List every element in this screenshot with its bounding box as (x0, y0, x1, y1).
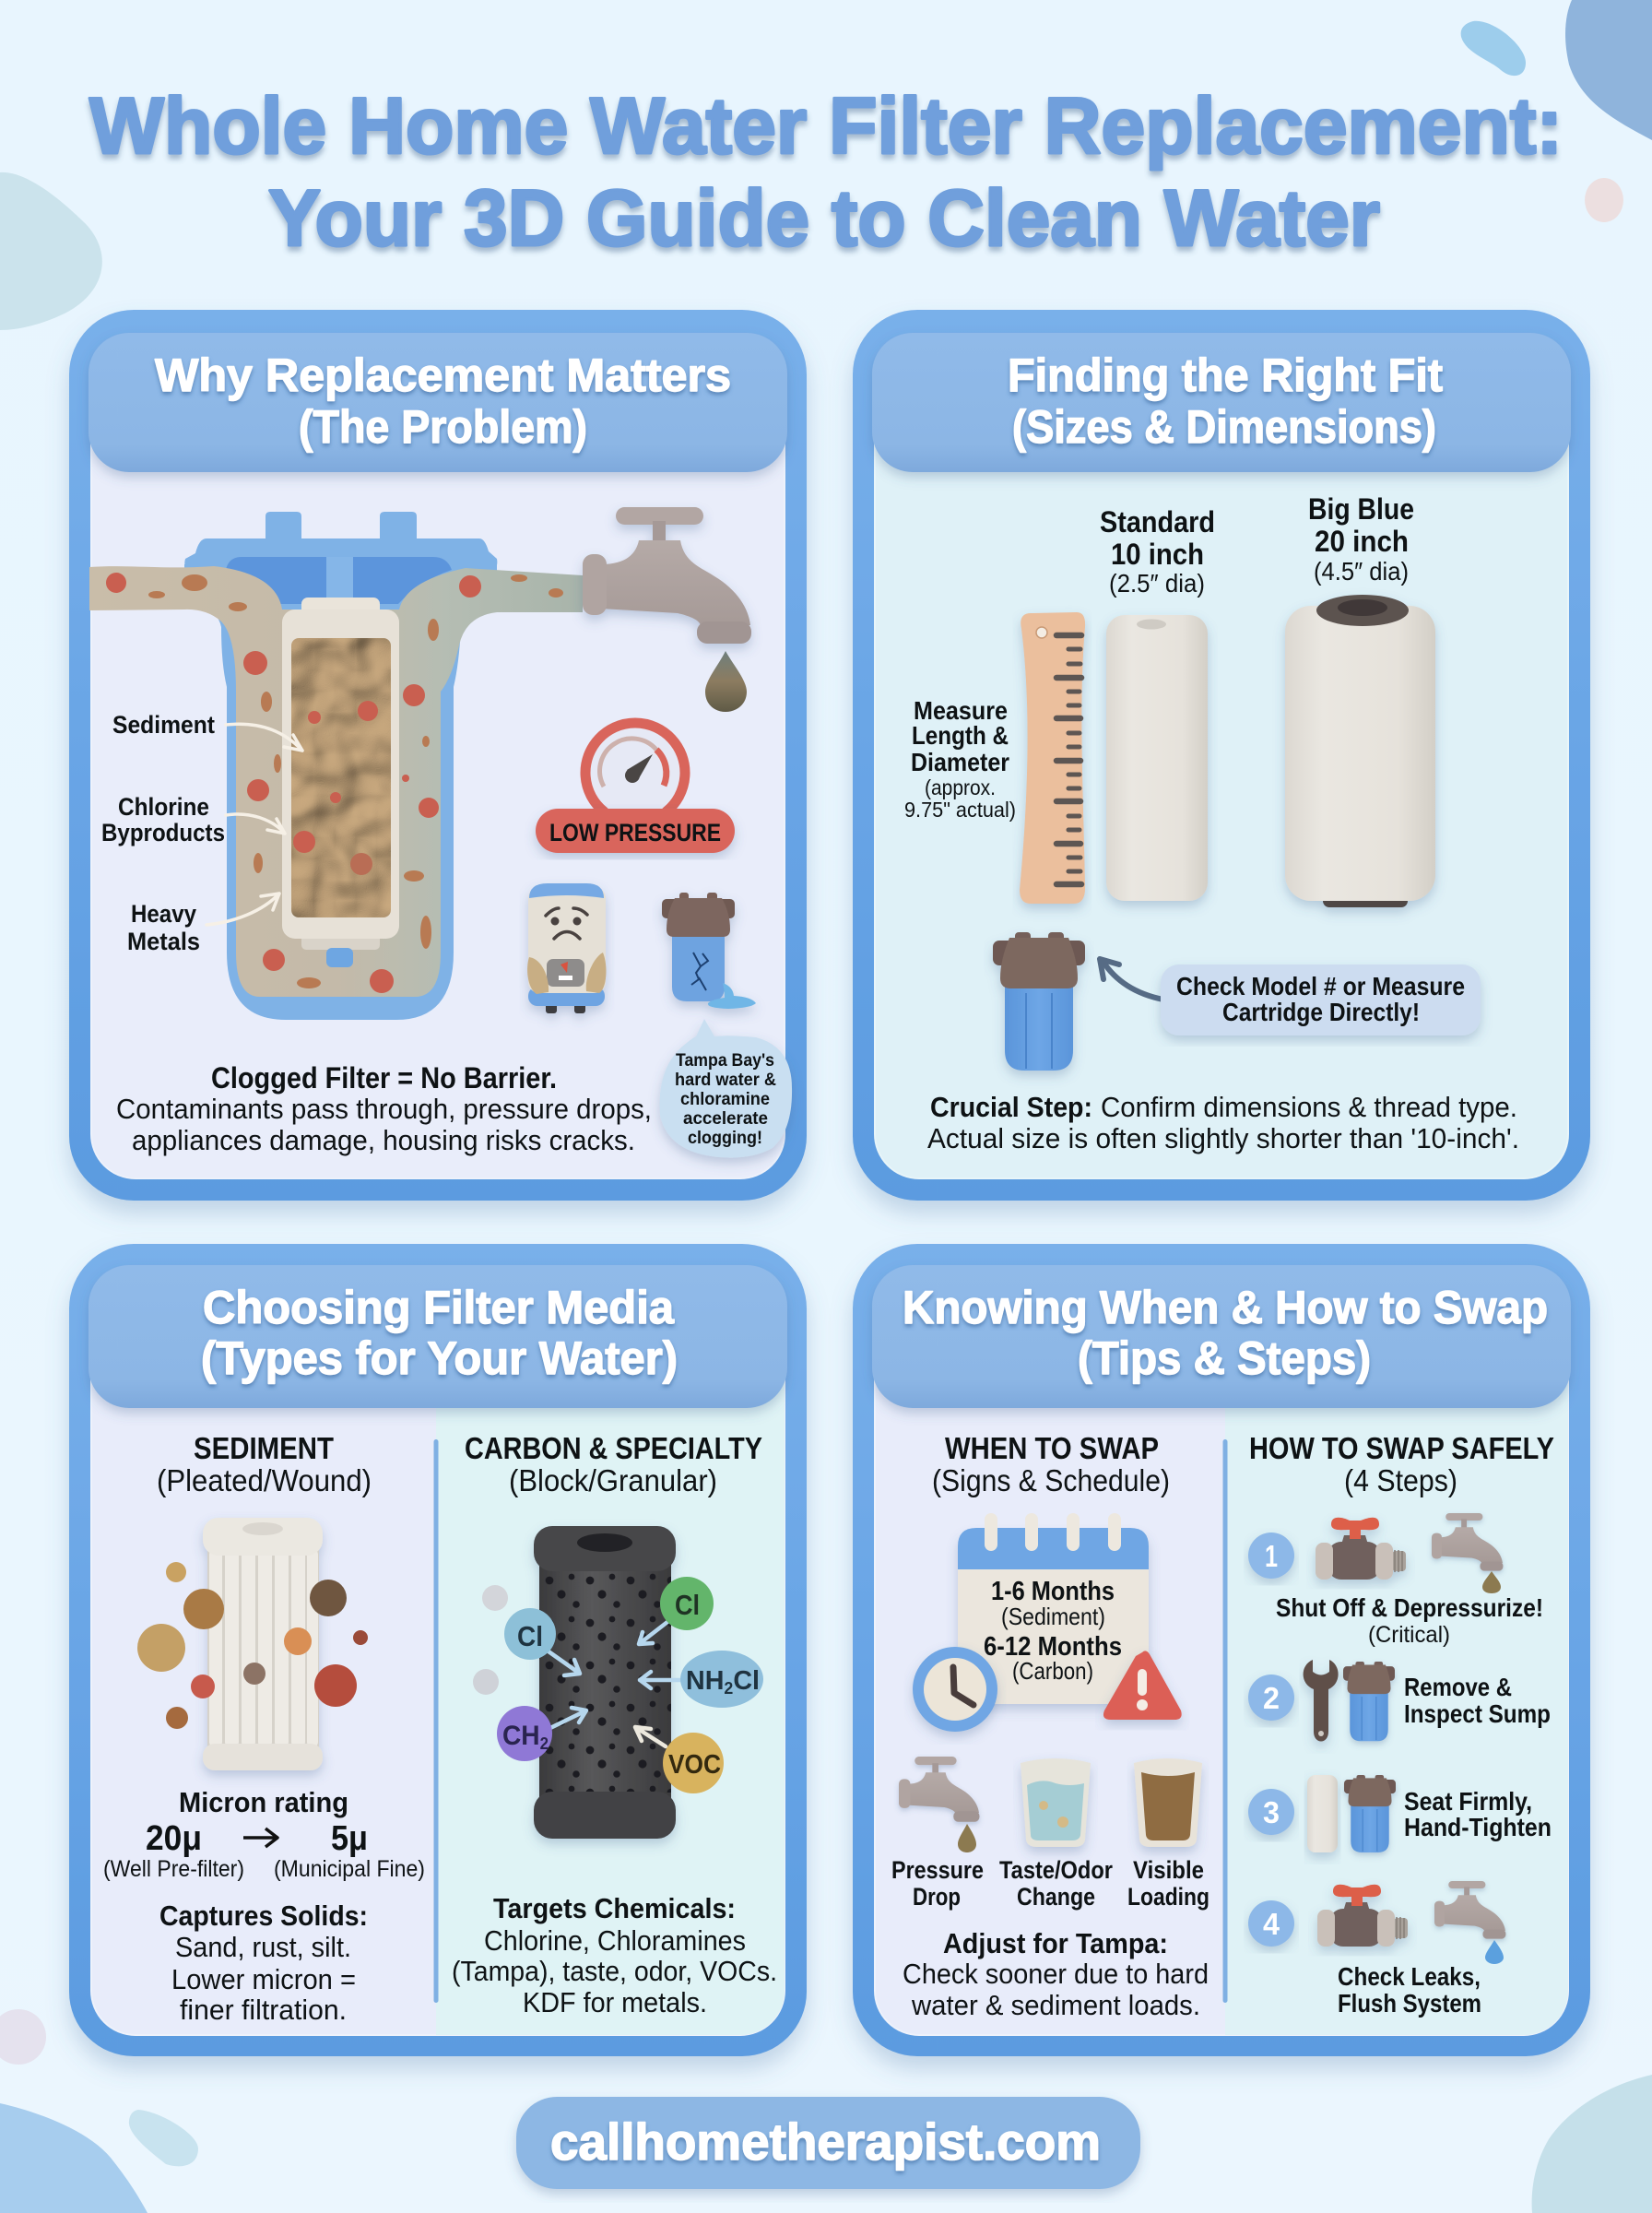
column heading: when to swap: WHEN TO SWAP (945, 1431, 1159, 1465)
footer: website pill: callhometherapist.com (550, 2112, 1101, 2171)
column heading: how to swap safely (1249, 1431, 1554, 1497)
text: targets chemicals: Chlorine, Chloramines (484, 1924, 746, 1957)
housing shell (266, 512, 417, 539)
step 2: remove and inspect (1248, 1660, 1551, 1741)
micron rating scale (103, 1786, 425, 1882)
sign: taste and odor change: Taste/Odor (999, 1856, 1113, 1884)
decorative blob: top right (1565, 0, 1652, 140)
badge: low pressure: LOW PRESSURE (549, 819, 721, 846)
micron rating scale: (Municipal Fine) (274, 1856, 425, 1882)
step 1: shut off (1248, 1513, 1543, 1648)
heading: why replacement matters: Why Replacement Matters (155, 349, 731, 401)
icon: chemical molecules: Cl (675, 1589, 700, 1621)
text: clogged filter summary (116, 1061, 652, 1156)
callout: check model number: Cartridge Directly! (1222, 998, 1420, 1026)
heading: choosing filter media: Choosing Filter Media (203, 1282, 675, 1333)
heading: knowing when and how to swap: Knowing When & How to Swap (903, 1282, 1548, 1333)
label: measure length and diameter: 9.75" actual) (904, 798, 1016, 822)
sign: pressure drop (891, 1757, 984, 1911)
sign: taste and odor change: Change (1017, 1883, 1095, 1911)
sign: visible loading (1127, 1758, 1210, 1911)
text: targets chemicals: Targets Chemicals: (493, 1892, 736, 1924)
footer: website pill (516, 2097, 1140, 2189)
text: adjust for tampa: Adjust for Tampa: (943, 1927, 1168, 1959)
title: Whole Home Water Filter Replacement: (89, 82, 1563, 171)
callout: tampa bay hard water (660, 1019, 792, 1158)
decorative blob: bottom left (0, 2103, 148, 2213)
column heading: how to swap safely: HOW TO SWAP SAFELY (1249, 1431, 1554, 1465)
label: sediment (112, 711, 302, 751)
micron rating scale: 20μ (146, 1819, 202, 1858)
decorative bead: lower left (0, 2009, 46, 2065)
label: heavy metals (127, 893, 279, 955)
icon: chemical molecules: VOC (668, 1750, 721, 1780)
title (89, 82, 1563, 263)
step 1: shut off: 1 (1265, 1539, 1278, 1573)
decorative blob: bottom right (1532, 2075, 1652, 2213)
cap pockets (226, 557, 452, 604)
heading: knowing when and how to swap: (Tips & Steps) (1078, 1332, 1371, 1384)
text: adjust for tampa (903, 1927, 1209, 2021)
filter housing cross-section (89, 512, 583, 1020)
decorative bead: right (1585, 178, 1623, 222)
label: big blue 20 inch: (4.5″ dia) (1314, 557, 1409, 586)
text: clogged filter summary: appliances damage, housing risks cracks. (132, 1124, 635, 1156)
sign: pressure drop: Drop (913, 1883, 961, 1911)
icon: big blue cartridge (1285, 595, 1435, 907)
label: big blue 20 inch: Big Blue (1308, 492, 1414, 526)
sign: visible loading: Visible (1133, 1856, 1204, 1884)
text: crucial step: Confirm dimensions & thread type. (1101, 1091, 1517, 1123)
decorative blob: left (0, 172, 102, 330)
text: captures solids: Lower micron = (171, 1963, 356, 1995)
column heading: carbon and specialty: (Block/Granular) (509, 1463, 717, 1497)
step 4: check leaks: Check Leaks, (1338, 1962, 1481, 1991)
icon: calendar schedule: 1-6 Months (991, 1577, 1115, 1606)
text: targets chemicals: KDF for metals. (523, 1986, 707, 2018)
icon: chemical molecules: Cl (733, 1666, 760, 1696)
text: crucial step (927, 1091, 1519, 1154)
label: big blue 20 inch (1308, 492, 1414, 586)
contaminant particles (106, 573, 481, 993)
label: heavy metals: Heavy (131, 900, 196, 928)
step 2: remove and inspect: Inspect Sump (1404, 1699, 1551, 1728)
icon: pleated sediment cartridge (203, 1518, 323, 1770)
column heading: how to swap safely: (4 Steps) (1344, 1463, 1457, 1497)
icon: standard cartridge (1106, 615, 1208, 901)
heading: choosing filter media (88, 1265, 787, 1408)
icon: sediment particles (137, 1562, 368, 1729)
step 3: seat firmly: Hand-Tighten (1404, 1813, 1552, 1841)
icon: clock (913, 1647, 997, 1732)
panel: finding the right fit (853, 310, 1590, 1201)
text: targets chemicals (452, 1892, 777, 2018)
step 4: check leaks: Flush System (1338, 1989, 1481, 2018)
callout: tampa bay hard water: Tampa Bay's (676, 1050, 774, 1071)
text: clogged filter summary: Contaminants pass through, pressure drops, (116, 1093, 652, 1125)
label: measure length and diameter (904, 696, 1016, 822)
micron rating scale: 5μ (331, 1819, 368, 1858)
icon: calendar schedule: 6-12 Months (984, 1632, 1122, 1662)
callout: check model number: Check Model # or Measure (1176, 972, 1465, 1000)
label: chlorine byproducts: Byproducts (101, 819, 225, 846)
text: captures solids: finer filtration. (180, 1994, 347, 2026)
icon: carbon block cartridge (534, 1526, 676, 1839)
sign: pressure drop: Pressure (891, 1856, 984, 1884)
clogged cartridge (282, 598, 399, 967)
decorative droplet: bottom left (129, 2110, 198, 2166)
column heading: when to swap (932, 1431, 1170, 1497)
micron rating scale: Micron rating (179, 1786, 348, 1818)
icon: chemical molecules: Cl (517, 1620, 543, 1652)
text: captures solids: Captures Solids: (159, 1899, 368, 1932)
sign: taste and odor change (999, 1758, 1113, 1911)
column heading: sediment: SEDIMENT (194, 1431, 334, 1465)
panel: why replacement matters (69, 310, 807, 1201)
icon: chemical molecules (473, 1577, 763, 1793)
dirty water (89, 566, 583, 997)
callout: tampa bay hard water: accelerate (683, 1108, 768, 1129)
step 4: check leaks (1248, 1881, 1505, 2018)
text: targets chemicals: (Tampa), taste, odor, VOCs. (452, 1955, 777, 1987)
badge: low pressure (536, 809, 735, 853)
text: captures solids (159, 1899, 368, 2026)
column heading: carbon and specialty: CARBON & SPECIALTY (465, 1431, 762, 1465)
icon: chemical molecules: CH (502, 1721, 542, 1751)
label: chlorine byproducts (101, 793, 285, 846)
step 1: shut off: (Critical) (1368, 1622, 1450, 1648)
icon: small filter housing (993, 932, 1085, 1071)
icon: calendar schedule (958, 1513, 1149, 1704)
label: heavy metals: Metals (127, 928, 200, 955)
step 2: remove and inspect: Remove & (1404, 1673, 1512, 1701)
heading: finding the right fit: (Sizes & Dimensions) (1012, 401, 1436, 453)
icon: wrench (1304, 1660, 1339, 1741)
micron rating scale: (Well Pre-filter) (103, 1856, 244, 1882)
heading: why replacement matters (88, 333, 787, 472)
label: measure length and diameter: Diameter (911, 748, 1009, 776)
step 3: seat firmly (1248, 1775, 1552, 1852)
icon: cracked filter housing (662, 893, 756, 1009)
callout: tampa bay hard water: chloramine (680, 1089, 770, 1109)
label: measure length and diameter: Length & (912, 721, 1009, 750)
text: crucial step: Crucial Step: (930, 1091, 1092, 1123)
text: captures solids: Sand, rust, silt. (175, 1931, 351, 1963)
icon: low pressure gauge (536, 723, 735, 853)
label: measure length and diameter: (approx. (925, 775, 996, 799)
icon: chemical molecules: 2 (540, 1734, 549, 1753)
icon: chemical molecules: NH (686, 1666, 725, 1696)
icon: chemical molecules: 2 (724, 1679, 733, 1698)
label: chlorine byproducts: Chlorine (118, 793, 209, 821)
text: adjust for tampa: water & sediment loads. (911, 1989, 1200, 2021)
icon: faucet with dirty drip (583, 507, 751, 712)
callout: tampa bay hard water: clogging! (688, 1128, 762, 1148)
icon: sad water heater (527, 883, 606, 1013)
arrow: to housing (1100, 959, 1163, 1000)
column heading: sediment (157, 1431, 372, 1497)
column heading: sediment: (Pleated/Wound) (157, 1463, 372, 1497)
text: crucial step: Actual size is often slightly shorter than '10-inch'. (927, 1122, 1519, 1154)
icon: ruler (1020, 612, 1085, 904)
label: standard 10 inch: (2.5″ dia) (1109, 569, 1205, 598)
icon: calendar schedule: (Sediment) (1001, 1603, 1105, 1630)
callout: check model number (1161, 964, 1481, 1035)
label: standard 10 inch (1100, 505, 1215, 598)
column heading: when to swap: (Signs & Schedule) (932, 1463, 1170, 1497)
label: big blue 20 inch: 20 inch (1315, 525, 1409, 558)
label: standard 10 inch: Standard (1100, 505, 1215, 538)
step 2: remove and inspect: 2 (1263, 1681, 1280, 1715)
label: sediment: Sediment (112, 711, 215, 739)
decorative droplet: top right (1461, 21, 1526, 76)
step 3: seat firmly: Seat Firmly, (1404, 1787, 1532, 1816)
callout: tampa bay hard water: hard water & (675, 1070, 776, 1090)
step 4: check leaks: 4 (1263, 1907, 1280, 1941)
column heading: carbon and specialty (465, 1431, 762, 1497)
text: clogged filter summary: Clogged Filter = No Barrier. (211, 1061, 557, 1095)
step 1: shut off: Shut Off & Depressurize! (1276, 1593, 1543, 1622)
label: measure length and diameter: Measure (914, 696, 1008, 725)
text: adjust for tampa: Check sooner due to hard (903, 1958, 1209, 1990)
icon: calendar schedule: (Carbon) (1012, 1657, 1093, 1685)
heading: finding the right fit: Finding the Right Fit (1008, 349, 1443, 401)
heading: why replacement matters: (The Problem) (299, 401, 587, 453)
heading: choosing filter media: (Types for Your Water) (201, 1332, 678, 1384)
sign: visible loading: Loading (1127, 1883, 1210, 1911)
label: standard 10 inch: 10 inch (1111, 538, 1204, 571)
panel: knowing when and how to swap (853, 1244, 1590, 2056)
title: Your 3D Guide to Clean Water (268, 174, 1380, 263)
panel: choosing filter media (69, 1244, 807, 2056)
icon: warning triangle (1103, 1651, 1182, 1720)
step 3: seat firmly: 3 (1263, 1795, 1280, 1829)
heading: knowing when and how to swap (872, 1265, 1571, 1408)
heading: finding the right fit (872, 333, 1571, 472)
